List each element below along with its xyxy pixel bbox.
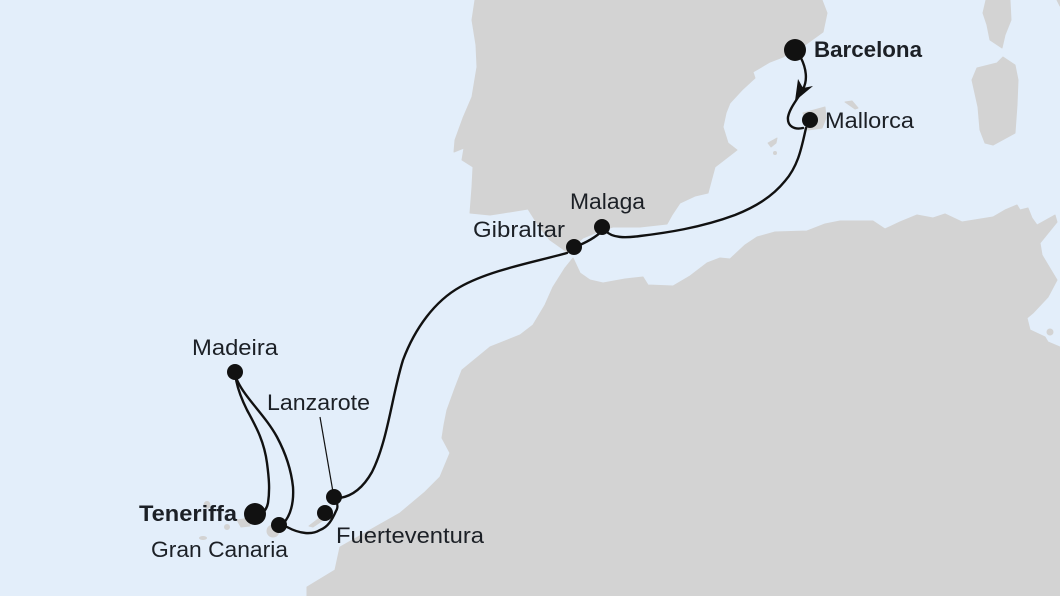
- marker: Malaga: [594, 219, 610, 235]
- marker: Fuerteventura: [317, 505, 333, 521]
- land: Iberian Peninsula: [454, 0, 827, 252]
- land: Menorca: [845, 101, 858, 109]
- land: Ibiza: [768, 138, 777, 147]
- land: La Palma: [204, 502, 210, 508]
- leg: Madeira to Teneriffa: [235, 372, 269, 513]
- land: Corsica: [983, 0, 1011, 48]
- label: Mallorca: Mallorca: [825, 108, 915, 133]
- leg: Mallorca to Malaga: [606, 128, 806, 237]
- label: Barcelona: Barcelona: [814, 37, 923, 62]
- land: Formentera: [774, 152, 776, 154]
- land: Galite island: [1047, 329, 1053, 335]
- marker: Barcelona: [784, 39, 806, 61]
- land: Italy fragment: [1057, 0, 1060, 6]
- label: Madeira: Madeira: [192, 335, 279, 360]
- leg: Malaga to Gibraltar: [575, 231, 602, 247]
- land: Sardinia: [972, 57, 1018, 145]
- label: Teneriffa: Teneriffa: [139, 501, 238, 526]
- cruise route: [235, 58, 806, 533]
- label: Lanzarote: Lanzarote: [267, 390, 370, 415]
- leg: Lanzarote to Fuerteventura to Gran Canaria: [279, 500, 338, 533]
- land: Fuerteventura: [309, 516, 325, 527]
- marker: Teneriffa: [244, 503, 266, 525]
- marker: Gran Canaria: [271, 517, 287, 533]
- leg: Gibraltar to Lanzarote: [340, 253, 567, 498]
- land: El Hierro: [200, 536, 206, 540]
- label: Gibraltar: Gibraltar: [473, 217, 565, 242]
- arrowhead: [795, 79, 813, 101]
- leg: Barcelona to Mallorca: [788, 58, 806, 129]
- land: Tenerife: [237, 518, 250, 527]
- marker: Madeira: [227, 364, 243, 380]
- marker: Lanzarote: [326, 489, 342, 505]
- label: Gran Canaria: Gran Canaria: [151, 537, 289, 562]
- label: Fuerteventura: Fuerteventura: [336, 523, 485, 548]
- land: North Africa: [307, 205, 1060, 596]
- marker: Mallorca: [802, 112, 818, 128]
- marker: Gibraltar: [566, 239, 582, 255]
- land: Gran Canaria: [267, 525, 279, 537]
- land: Mallorca: [803, 107, 826, 130]
- label: Malaga: Malaga: [570, 189, 646, 214]
- Lanzarote leader line: [320, 417, 333, 492]
- leg: Gran Canaria to Madeira: [237, 380, 293, 524]
- land: La Gomera: [224, 524, 230, 530]
- port markers: [227, 39, 818, 533]
